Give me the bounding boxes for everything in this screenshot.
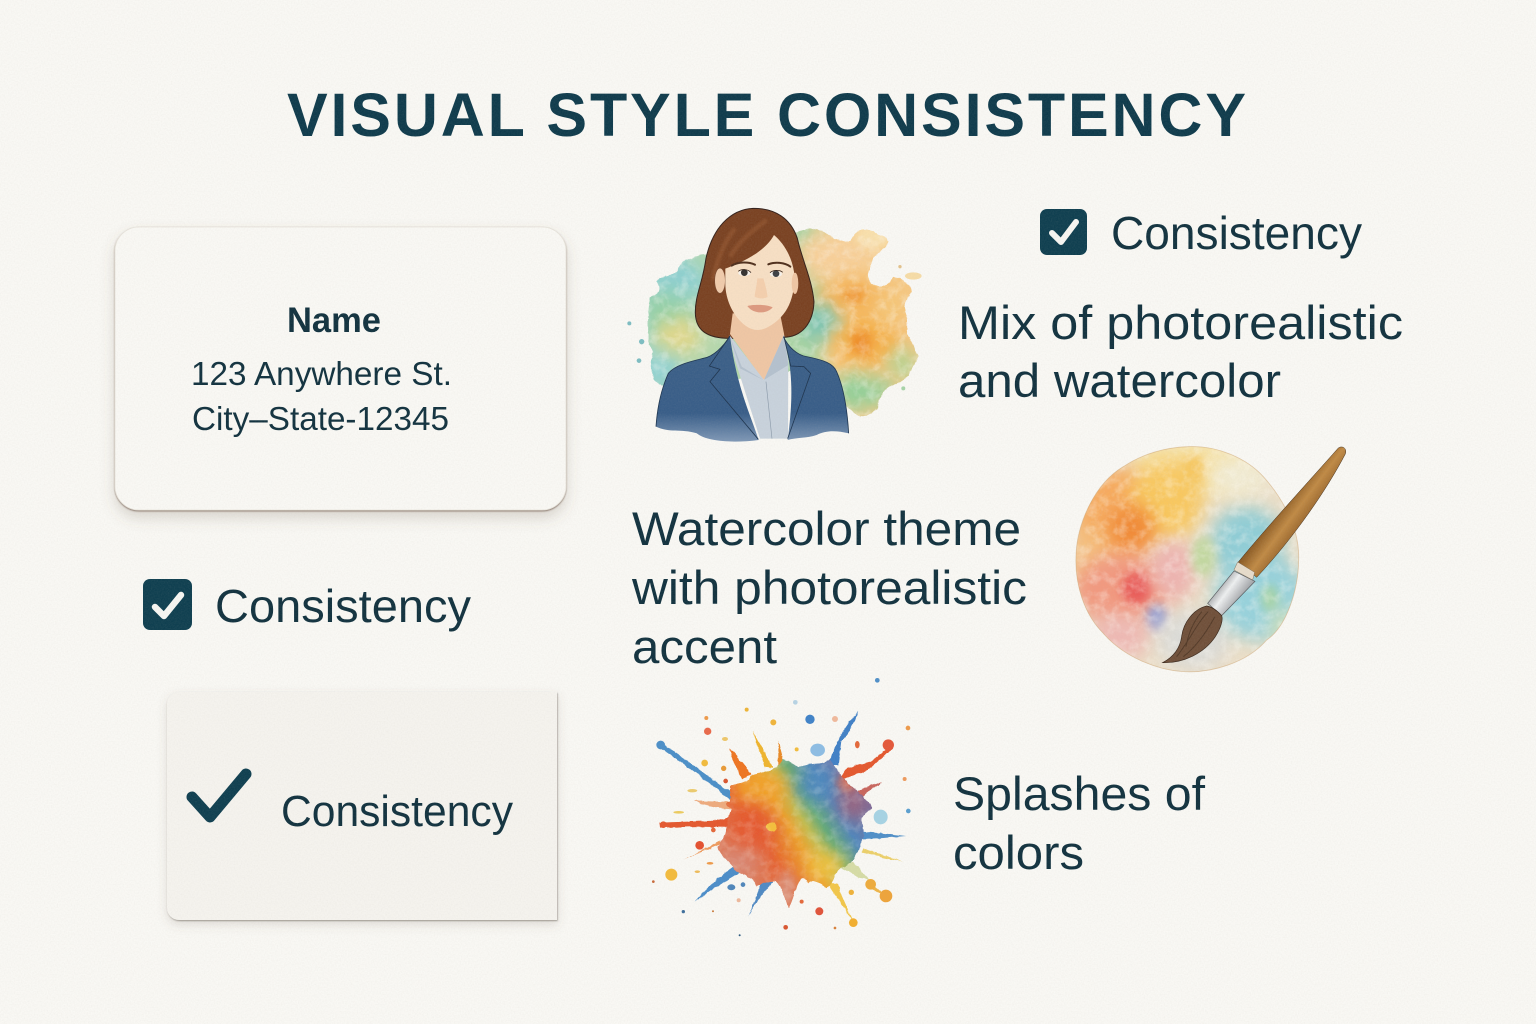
- icon: large check mark: [192, 774, 246, 817]
- icon: checkbox: [143, 579, 192, 630]
- splatter dots: [627, 265, 922, 390]
- top right consistency label: Consistency: [1111, 207, 1362, 259]
- text: splashes caption: colors: [953, 826, 1084, 879]
- text: watercolor theme caption: [631, 502, 1027, 673]
- title: VISUAL STYLE CONSISTENCY: [287, 81, 1246, 149]
- watercolor disc: [1076, 446, 1298, 672]
- illustration: rainbow paint splash: [652, 678, 911, 936]
- address street line: 123 Anywhere St.: [191, 356, 452, 393]
- text: splashes caption: [953, 767, 1206, 879]
- splash droplets: [652, 678, 911, 936]
- text: splashes caption: Splashes of: [953, 767, 1206, 820]
- address city line: City–State-12345: [192, 401, 449, 438]
- facial features: [732, 263, 790, 312]
- disc edge: [1076, 447, 1299, 672]
- face: [725, 235, 794, 330]
- hair: [695, 208, 814, 338]
- card consistency label: Consistency: [281, 787, 513, 836]
- text: watercolor theme caption: with photorealistic: [631, 561, 1027, 614]
- checkbox label: left consistency: [143, 579, 471, 632]
- wash background: [648, 228, 918, 416]
- paintbrush: [1163, 447, 1346, 663]
- panel: address card: [115, 227, 566, 510]
- text: mix caption: and watercolor: [958, 354, 1281, 407]
- text: watercolor theme caption: Watercolor theme: [632, 502, 1021, 555]
- consistency label: Consistency: [215, 580, 471, 632]
- shirt: [729, 335, 788, 439]
- jacket: [656, 336, 849, 442]
- text: watercolor theme caption: accent: [632, 620, 777, 673]
- splash rays: [659, 712, 906, 922]
- splash blob: [718, 759, 872, 908]
- illustration: portrait on watercolor wash: [627, 208, 927, 442]
- address name: Name: [287, 301, 381, 340]
- panel: consistency card: [167, 692, 557, 920]
- illustration: watercolor disc with paintbrush: [1070, 437, 1346, 677]
- text: mix caption: Mix of photorealistic: [958, 296, 1403, 349]
- icon: checkbox top right: [1040, 209, 1087, 255]
- ears: [715, 268, 725, 293]
- text: mix caption: [958, 296, 1403, 407]
- neck: [730, 313, 787, 380]
